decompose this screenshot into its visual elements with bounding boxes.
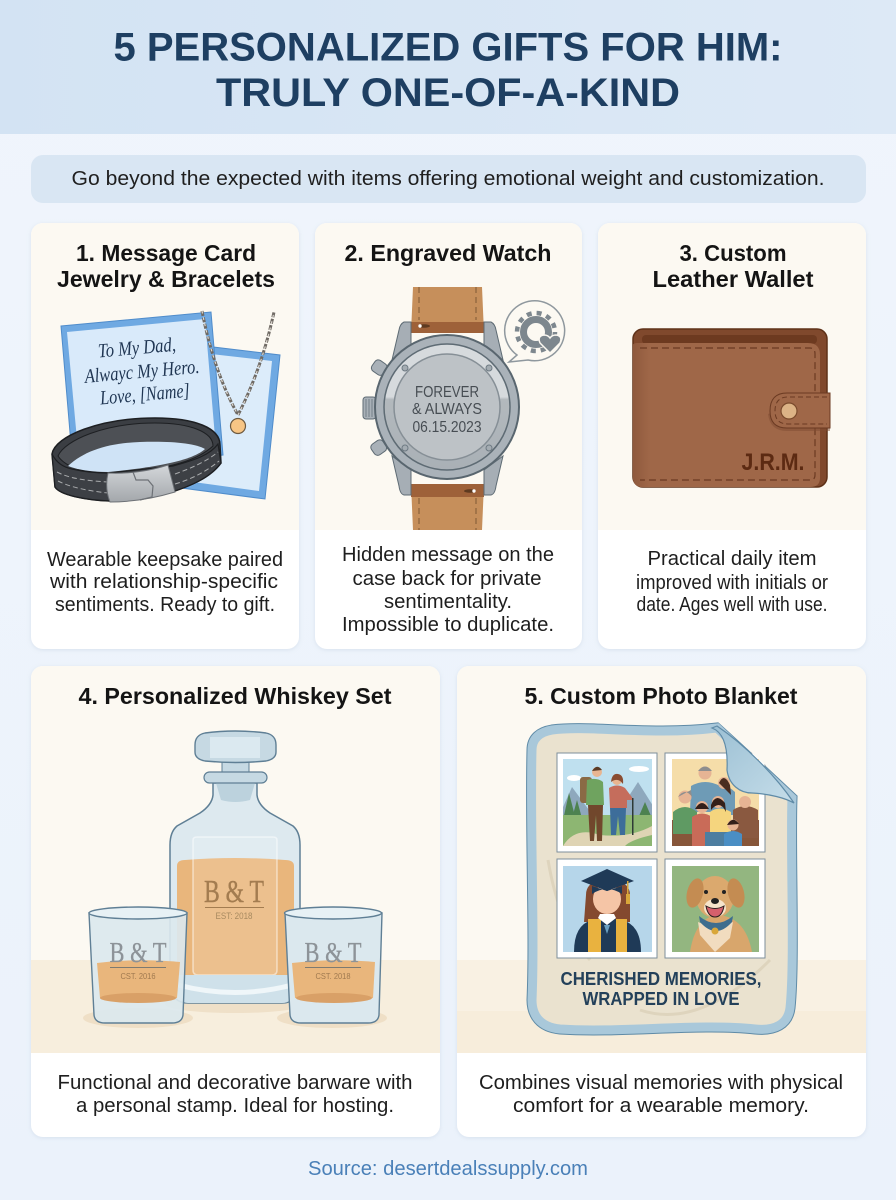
icon: gear and heart bubble	[505, 301, 565, 362]
illustration: wallet	[633, 329, 830, 487]
glass right: B & T	[304, 938, 362, 969]
decanter	[170, 731, 300, 1003]
panel: custom leather wallet	[598, 223, 866, 649]
decanter: B & T	[204, 873, 264, 909]
heading: item 3: 3. Custom	[680, 240, 786, 266]
description: item 5	[479, 1072, 843, 1117]
description: item 4	[58, 1072, 412, 1117]
strap	[411, 287, 484, 530]
subtitle bar: Go beyond the expected with items offering emotional weight and customization.	[72, 168, 824, 190]
heading: item 1: 1. Message Card	[76, 240, 256, 266]
heading: item 3: Leather Wallet	[652, 266, 814, 292]
subtitle bar	[31, 155, 866, 203]
description: item 2: Impossible to duplicate.	[342, 614, 554, 636]
case back	[375, 335, 519, 479]
header banner	[0, 0, 896, 134]
blanket caption: CHERISHED MEMORIES,	[560, 969, 762, 989]
source credit: Source: desertdealssupply.com	[308, 1158, 588, 1180]
description: item 3: improved with initials or	[636, 572, 828, 594]
illustration: decanter and glasses	[83, 731, 387, 1028]
photo: family	[665, 753, 765, 852]
decanter: EST: 2018	[216, 911, 252, 921]
description: item 5: Combines visual memories with physical	[479, 1072, 843, 1094]
bracelet	[52, 418, 221, 502]
engraving: 06.15.2023	[412, 419, 482, 436]
heading: item 1	[57, 240, 275, 292]
clasp	[768, 393, 830, 431]
engraving: & ALWAYS	[412, 401, 482, 418]
description: item 1	[47, 549, 283, 616]
illustration: cards, necklace and bracelet	[52, 311, 280, 502]
description: item 4: a personal stamp. Ideal for hosting.	[76, 1095, 394, 1117]
description: item 3: Practical daily item	[648, 548, 816, 570]
heading: item 4: 4. Personalized Whiskey Set	[78, 683, 392, 709]
description: item 1: Wearable keepsake paired	[47, 549, 283, 571]
photo: dog	[665, 859, 765, 958]
glass right	[284, 907, 382, 1023]
heading: item 3	[652, 240, 814, 292]
description: item 3: date. Ages well with use.	[636, 594, 828, 616]
panel: custom photo blanket	[457, 666, 866, 1137]
description: item 2	[342, 544, 554, 636]
monogram: J.R.M.	[742, 449, 804, 476]
heading: item 2: 2. Engraved Watch	[344, 240, 552, 266]
lugs	[392, 322, 503, 495]
blanket caption	[560, 969, 762, 1009]
illustration: photo blanket	[532, 722, 804, 1030]
heading: item 1: Jewelry & Bracelets	[57, 266, 275, 292]
title	[114, 26, 782, 115]
glass right: CST. 2018	[316, 971, 351, 981]
description: item 2: sentimentality.	[384, 591, 512, 613]
front message card	[61, 312, 223, 468]
necklace	[202, 311, 274, 434]
engraving	[412, 384, 482, 436]
panel: engraved watch	[315, 223, 582, 649]
panel: personalized whiskey set	[31, 666, 440, 1137]
engraving: FOREVER	[415, 384, 479, 401]
illustration: watch back	[363, 287, 565, 530]
photo: graduate	[557, 859, 657, 958]
front message card: Alwayc My Hero.	[82, 356, 200, 388]
heading: item 5: 5. Custom Photo Blanket	[524, 683, 798, 709]
description: item 3	[636, 548, 828, 616]
glass left: B & T	[110, 938, 166, 969]
description: item 2: Hidden message on the	[342, 544, 554, 566]
title: TRULY ONE-OF-A-KIND	[216, 71, 680, 115]
glass left	[89, 907, 187, 1023]
pushers and crown	[363, 358, 389, 457]
description: item 5: comfort for a wearable memory.	[513, 1095, 809, 1117]
title: 5 PERSONALIZED GIFTS FOR HIM:	[114, 26, 782, 70]
panel: message card jewelry	[31, 223, 299, 649]
description: item 1: sentiments. Ready to gift.	[55, 594, 275, 616]
description: item 1: with relationship-specific	[49, 571, 278, 593]
glass left: CST. 2016	[120, 971, 156, 981]
description: item 4: Functional and decorative barware with	[58, 1072, 412, 1094]
front message card: Love, [Name]	[98, 380, 191, 410]
photo: hikers	[555, 753, 665, 852]
description: item 2: case back for private	[352, 568, 542, 590]
blanket caption: WRAPPED IN LOVE	[582, 989, 740, 1009]
back card	[120, 346, 280, 499]
blanket corner peel	[712, 722, 804, 803]
front message card: To My Dad,	[97, 334, 177, 363]
